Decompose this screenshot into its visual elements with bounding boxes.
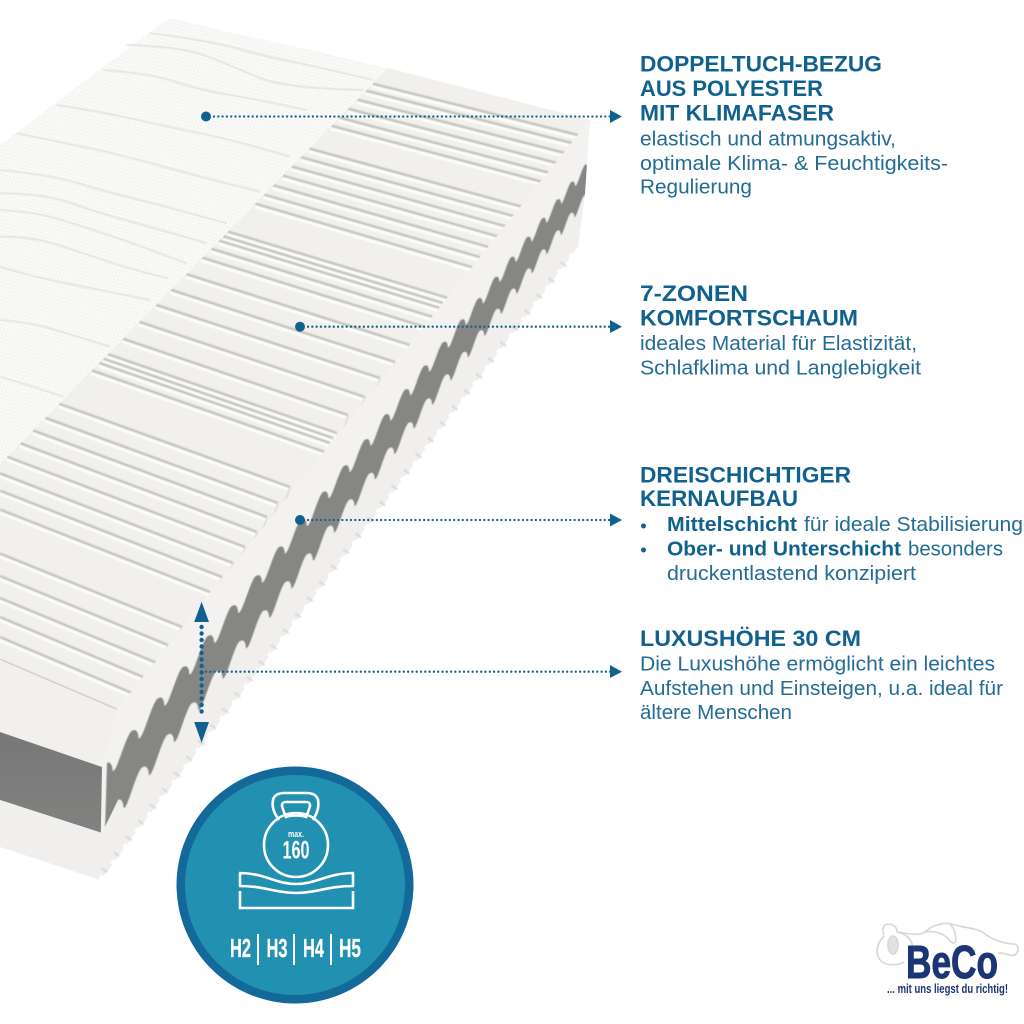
badge: max weight and firmness xyxy=(176,766,414,1004)
body: foam: ideales Material für Elastizität, xyxy=(640,332,917,355)
body: height: Die Luxushöhe ermöglicht ein leichtes xyxy=(640,652,995,676)
heading: core xyxy=(640,462,851,511)
body: foam: Schlafklima und Langlebigkeit xyxy=(640,356,921,380)
text block: foam xyxy=(640,281,921,380)
body: height: ältere Menschen xyxy=(640,701,792,724)
text block: cover xyxy=(640,52,948,198)
kettlebell label: max. xyxy=(288,829,304,840)
firmness labels: H3 xyxy=(266,933,288,963)
firmness labels xyxy=(230,933,361,965)
kettlebell label xyxy=(282,829,310,864)
firmness labels: H4 xyxy=(303,933,324,963)
foam side face with wavy grey core xyxy=(98,120,590,880)
callout line: comfort foam xyxy=(295,320,622,333)
heading: cover: AUS POLYESTER xyxy=(640,76,823,101)
callout line: core xyxy=(295,514,622,526)
bullet list: core: Ober- und Unterschicht xyxy=(667,538,901,560)
heading: foam: KOMFORTSCHAUM xyxy=(640,306,858,330)
body: cover: elastisch und atmungsaktiv, xyxy=(640,128,896,150)
heading: cover: MIT KLIMAFASER xyxy=(640,100,834,126)
bullet list: core: besonders xyxy=(908,538,1003,560)
icon: mattress xyxy=(239,873,354,908)
body: height xyxy=(640,652,1003,724)
heading: foam xyxy=(640,281,858,330)
logo: BeCo xyxy=(877,923,1018,996)
bullet list: core: druckentlastend konzipiert xyxy=(667,562,916,585)
foam top surface with ribbed zones xyxy=(0,68,590,720)
foam front face xyxy=(0,660,117,880)
body: cover: optimale Klima- & Feuchtigkeits- xyxy=(640,152,948,175)
bullet list: core xyxy=(641,513,1023,585)
body: foam xyxy=(640,332,921,380)
heading: cover xyxy=(640,52,882,126)
icon: kettlebell xyxy=(264,793,328,877)
body: cover xyxy=(640,128,948,198)
heading: core: DREISCHICHTIGER xyxy=(640,462,851,488)
cover fabric xyxy=(0,19,388,464)
bullet list: core: für ideale Stabilisierung xyxy=(804,513,1023,536)
callout line: cover xyxy=(201,110,622,123)
wordmark: BeCo xyxy=(906,936,998,988)
icon: sleeping bear outline xyxy=(877,923,1018,965)
firmness labels: H2 xyxy=(230,933,251,963)
bullet list: core: Mittelschicht xyxy=(667,513,797,536)
body: height: Aufstehen und Einsteigen, u.a. ideal für xyxy=(640,677,1003,700)
text block: core xyxy=(640,462,1023,585)
heading: core: KERNAUFBAU xyxy=(640,486,798,511)
arrow: vertical height xyxy=(194,602,209,743)
firmness labels: H5 xyxy=(339,933,361,963)
body: cover: Regulierung xyxy=(640,176,752,198)
text block: height xyxy=(640,626,1003,724)
heading: height: LUXUSHÖHE 30 CM xyxy=(640,626,861,651)
mattress xyxy=(0,20,590,880)
heading: foam: 7-ZONEN xyxy=(640,281,748,306)
kettlebell label: 160 xyxy=(282,836,310,864)
callout line: height xyxy=(206,665,622,678)
heading: cover: DOPPELTUCH-BEZUG xyxy=(640,52,882,76)
